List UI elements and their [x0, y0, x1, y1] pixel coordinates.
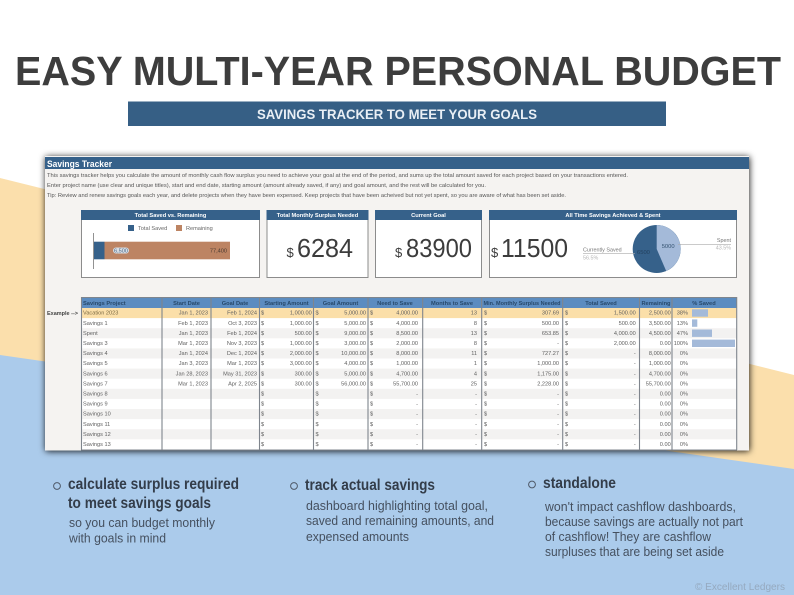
instructions text: Tip: Review and renew savings goals each year, and delete projects when they have been expensed. Keep projects that have been acheived but not yet spent, so you are aware of what has been set aside.	[47, 193, 566, 199]
savings projects table	[81, 297, 737, 450]
row: Savings 7: 25	[471, 381, 477, 387]
row: Savings 10	[83, 412, 688, 418]
row: Spent: 9,000.00	[344, 331, 366, 337]
row: Vacation 2023: 13	[471, 311, 477, 317]
row: Savings 5: $	[316, 361, 320, 367]
feature: standalone: won't impact cashflow dashboards,	[544, 500, 736, 514]
row: Savings 1: 3,500.00	[649, 321, 671, 327]
row: Vacation 2023: $	[565, 311, 569, 317]
feature: track actual savings: saved and remaining amounts, and	[306, 514, 494, 528]
row: Savings 6: 4	[474, 371, 477, 377]
row: Savings 6: 4,700.00	[396, 371, 418, 377]
row: Savings 13: $	[565, 442, 569, 448]
subtitle banner	[128, 102, 666, 126]
row: Vacation 2023: Jan 1, 2023	[179, 311, 208, 317]
row: Savings 1: $	[484, 321, 488, 327]
row: Savings 10: Savings 10	[83, 412, 111, 418]
row: Savings 5: 0%	[680, 361, 688, 367]
row: Savings 3: Nov 3, 2023	[227, 341, 257, 347]
row: Savings 11: -	[557, 422, 559, 428]
row: Savings 5: -	[634, 361, 636, 367]
subtitle banner: SAVINGS TRACKER TO MEET YOUR GOALS	[257, 106, 537, 122]
pie chart: 43.5%	[716, 246, 731, 252]
card: total saved vs remaining: Total Saved vs. Remaining	[135, 213, 207, 219]
row: Savings 13: -	[634, 442, 636, 448]
row: Savings 11: 0%	[680, 422, 688, 428]
row: Savings 10: $	[261, 412, 265, 418]
row: Savings 8	[83, 392, 688, 398]
table header row: Need to Save	[377, 301, 413, 307]
copyright: © Excellent Ledgers	[695, 581, 785, 593]
row: Savings 12: 0%	[680, 432, 688, 438]
row: Savings 5: $	[565, 361, 569, 367]
pie chart: 6500	[637, 250, 650, 256]
row: Savings 11: $	[261, 422, 265, 428]
row: Savings 3: $	[316, 341, 320, 347]
table header row: Months to Save	[431, 301, 473, 307]
row: Spent: $	[484, 331, 488, 337]
row: Vacation 2023: 38%	[677, 311, 688, 317]
row: Savings 4: 8,000.00	[649, 351, 671, 357]
column rules	[81, 297, 737, 450]
row: Vacation 2023: 1,500.00	[614, 311, 636, 317]
row: Savings 13: 0.00	[660, 442, 671, 448]
stacked bar chart	[94, 233, 230, 269]
example pointer label: Example -->	[47, 311, 79, 317]
stacked bar chart: 6,500	[114, 248, 128, 254]
table header row: Total Saved	[585, 301, 617, 307]
row: Savings 4: -	[634, 351, 636, 357]
row: Spent: Feb 1, 2024	[227, 331, 257, 337]
row: Savings 3	[83, 340, 735, 347]
card: all time savings achieved and spent: $	[491, 245, 499, 260]
row: Savings 9: 0.00	[660, 402, 671, 408]
row: Savings 6: Jan 28, 2023	[176, 371, 208, 377]
row: Savings 6: 300.00	[295, 371, 312, 377]
row: Spent: 13	[471, 331, 477, 337]
row: Savings 4: Dec 1, 2024	[227, 351, 257, 357]
row: Savings 7: Savings 7	[83, 381, 108, 387]
row: Savings 12: $	[316, 432, 320, 438]
row: Savings 5: $	[261, 361, 265, 367]
row: Savings 10: 0%	[680, 412, 688, 418]
row: Savings 13: $	[484, 442, 488, 448]
row: Savings 5: Jan 3, 2023	[179, 361, 208, 367]
row: Savings 7: $	[484, 381, 488, 387]
card: current goal: 83900	[406, 233, 472, 263]
row: Spent: 47%	[677, 331, 688, 337]
row: Savings 3: $	[261, 341, 265, 347]
table header row	[81, 297, 737, 308]
row: Savings 5: 1,000.00	[537, 361, 559, 367]
row: Savings 1: Oct 3, 2023	[228, 321, 257, 327]
card: total monthly surplus needed: 6284	[297, 233, 353, 263]
feature: track actual savings: dashboard highlighting total goal,	[306, 499, 488, 513]
row: Savings 5: $	[370, 361, 374, 367]
row: Savings 10: -	[557, 412, 559, 418]
row: Savings 11: Savings 11	[83, 422, 110, 428]
row: Savings 3: 3,000.00	[344, 341, 366, 347]
instructions text: Enter project name (use clear and unique titles), start and end date, starting amount (amount already saved, if any) and goal amount, and the rest will be calculated for you.	[47, 183, 486, 189]
row: Savings 4: $	[484, 351, 488, 357]
row: Savings 8: $	[484, 392, 488, 398]
row: Savings 6	[83, 371, 688, 377]
row: Savings 6: 4,700.00	[649, 371, 671, 377]
pie chart: 56.5%	[583, 256, 598, 262]
row: Savings 13	[83, 442, 688, 448]
row: Savings 6: $	[370, 371, 374, 377]
row: Savings 12: 0.00	[660, 432, 671, 438]
row: Savings 12: -	[416, 432, 418, 438]
row: Vacation 2023: 5,000.00	[344, 311, 366, 317]
card: current goal: $	[395, 245, 403, 260]
row: Savings 7: 300.00	[295, 381, 312, 387]
row: Savings 1: 500.00	[619, 321, 636, 327]
row: Savings 12: -	[557, 432, 559, 438]
row: Savings 12: $	[370, 432, 374, 438]
row: Savings 1: $	[565, 321, 569, 327]
row: Savings 7: -	[634, 381, 636, 387]
row: Savings 6: May 31, 2023	[223, 371, 257, 377]
row: Savings 6: $	[316, 371, 320, 377]
feature: calculate surplus	[54, 476, 239, 546]
card: current goal: Current Goal	[411, 213, 446, 219]
row: Savings 3: $	[484, 341, 488, 347]
row: Savings 9: 0%	[680, 402, 688, 408]
row: Savings 13: -	[475, 442, 477, 448]
row: Savings 1: 8	[474, 321, 477, 327]
row: Savings 5: 3,000.00	[290, 361, 312, 367]
row: Savings 6: $	[565, 371, 569, 377]
row: Spent: 4,500.00	[649, 331, 671, 337]
row: Savings 8: $	[261, 392, 265, 398]
row: Savings 3: 100%	[674, 341, 688, 347]
row: Savings 8: 0%	[680, 392, 688, 398]
card: total saved vs remaining	[81, 210, 260, 278]
row: Spent: 500.00	[295, 331, 312, 337]
feature: standalone	[529, 475, 744, 559]
row: Savings 6: $	[484, 371, 488, 377]
instructions text	[47, 173, 628, 199]
row: Savings 11: 0.00	[660, 422, 671, 428]
row: Savings 1: $	[261, 321, 265, 327]
feature: standalone: because savings are actually not part	[545, 515, 744, 529]
feature: calculate surplus: so you can budget monthly	[69, 516, 216, 530]
row: Savings 13: 0%	[680, 442, 688, 448]
row: Spent	[83, 330, 712, 337]
row: Savings 9: $	[370, 402, 374, 408]
row: Spent: Spent	[83, 331, 98, 337]
row: Savings 5: 1	[474, 361, 477, 367]
card: total monthly surplus needed: Total Monthly Surplus Needed	[277, 213, 359, 219]
row: Savings 1: Feb 1, 2023	[178, 321, 208, 327]
row: Savings 11: -	[634, 422, 636, 428]
row: Savings 4: $	[370, 351, 374, 357]
row: Savings 10: 0.00	[660, 412, 671, 418]
row: Savings 5: 1,000.00	[649, 361, 671, 367]
row: Savings 1	[83, 319, 697, 327]
row: Savings 1: Savings 1	[83, 321, 108, 327]
row: Savings 12: -	[634, 432, 636, 438]
row: Savings 9: -	[475, 402, 477, 408]
row: Savings 12: $	[565, 432, 569, 438]
row: Savings 1: 13%	[677, 321, 688, 327]
row: Savings 5: 4,000.00	[344, 361, 366, 367]
row: Savings 3: Savings 3	[83, 341, 108, 347]
row: Savings 4: 2,000.00	[290, 351, 312, 357]
row: Savings 3: $	[565, 341, 569, 347]
row: Spent: 653.85	[542, 331, 559, 337]
row: Savings 1: 5,000.00	[344, 321, 366, 327]
row: Savings 8: -	[557, 392, 559, 398]
row: Vacation 2023: 2,500.00	[649, 311, 671, 317]
row: Savings 10: $	[370, 412, 374, 418]
row: Savings 6: -	[634, 371, 636, 377]
card: total monthly surplus needed	[266, 210, 368, 278]
row: Savings 7: 55,700.00	[646, 381, 671, 387]
title: EASY MULTI-YEAR PERSONAL BUDGET	[15, 48, 781, 94]
row: Savings 7: 2,228.00	[537, 381, 559, 387]
instructions text: This savings tracker helps you calculate the amount of monthly cash flow surplus you need to achieve your goal at the end of the period, and sums up the total amount saved for each project based on your transactions entered.	[47, 173, 628, 179]
row: Savings 12	[83, 432, 688, 438]
row: Savings 12: Savings 12	[83, 432, 111, 438]
row: Savings 7: Mar 1, 2023	[178, 381, 208, 387]
row: Savings 6: $	[261, 371, 265, 377]
row: Savings 9: $	[565, 402, 569, 408]
pie chart: 5000	[662, 244, 675, 250]
table header row: Starting Amount	[264, 301, 309, 307]
row: Savings 7: $	[370, 381, 374, 387]
row: Savings 7	[83, 381, 688, 387]
row: Savings 3: $	[370, 341, 374, 347]
card: all time savings achieved and spent: All Time Savings Achieved & Spent	[565, 213, 661, 219]
feature: track actual savings: track actual savings	[305, 477, 435, 494]
row: Savings 7: $	[316, 381, 320, 387]
row: Savings 5: 1,000.00	[396, 361, 418, 367]
row: Savings 13: $	[316, 442, 320, 448]
row: Savings 3: Mar 1, 2023	[178, 341, 208, 347]
row: Savings 1: 4,000.00	[396, 321, 418, 327]
card: all time savings achieved and spent: 11500	[501, 233, 568, 263]
row: Savings 13: -	[416, 442, 418, 448]
card: total monthly surplus needed: $	[286, 245, 294, 260]
sheet header: Savings Tracker	[47, 159, 112, 169]
row: Savings 6: 0%	[680, 371, 688, 377]
sheet header	[45, 157, 749, 169]
row: Savings 1: $	[370, 321, 374, 327]
row: Savings 8: 0.00	[660, 392, 671, 398]
pie chart: Currently Saved	[583, 248, 622, 254]
table header row: Remaining	[641, 301, 671, 307]
row: Vacation 2023: 4,000.00	[396, 311, 418, 317]
row: Savings 13: $	[370, 442, 374, 448]
row: Savings 4: $	[316, 351, 320, 357]
row: Vacation 2023: $	[370, 311, 374, 317]
row: Savings 7: 55,700.00	[393, 381, 418, 387]
row: Savings 10: -	[634, 412, 636, 418]
row: Savings 11: $	[370, 422, 374, 428]
row: Savings 1: 1,000.00	[290, 321, 312, 327]
row: Savings 9: Savings 9	[83, 402, 108, 408]
row: Savings 5: Mar 1, 2023	[227, 361, 257, 367]
row: Savings 6: 1,175.00	[537, 371, 559, 377]
row: Vacation 2023: Vacation 2023	[83, 311, 118, 317]
row: Savings 1: $	[316, 321, 320, 327]
row: Savings 4: 727.27	[542, 351, 559, 357]
row: Vacation 2023: Feb 1, 2024	[227, 311, 257, 317]
feature: track actual savings	[291, 477, 494, 544]
feature: standalone: standalone	[543, 475, 616, 492]
row: Savings 8: -	[475, 392, 477, 398]
row: Savings 4	[83, 351, 688, 357]
row: Savings 7: 56,000.00	[341, 381, 366, 387]
row: Savings 4: 11	[471, 351, 477, 357]
row: Savings 12: $	[484, 432, 488, 438]
row: Savings 10: $	[484, 412, 488, 418]
row: Vacation 2023: 307.69	[542, 311, 559, 317]
row: Spent: $	[261, 331, 265, 337]
card: all time savings achieved and spent	[489, 210, 737, 278]
pie chart	[583, 225, 731, 273]
background: cream band	[0, 178, 794, 480]
feature: track actual savings: expensed amounts	[306, 530, 409, 544]
row: Savings 7: Apr 2, 2025	[228, 381, 257, 387]
feature: calculate surplus: with goals in mind	[68, 532, 166, 546]
row: Vacation 2023: $	[484, 311, 488, 317]
row: Savings 1: 500.00	[542, 321, 559, 327]
row: Savings 11	[83, 422, 688, 428]
row: Savings 3: 2,000.00	[614, 341, 636, 347]
row: Savings 13: -	[557, 442, 559, 448]
table header row: % Saved	[692, 301, 716, 307]
row: Savings 4: 10,000.00	[341, 351, 366, 357]
row: Savings 9: -	[416, 402, 418, 408]
row: Savings 4: 8,000.00	[396, 351, 418, 357]
background: blue band	[0, 355, 794, 595]
row: Savings 4: Jan 1, 2024	[179, 351, 208, 357]
row: Vacation 2023: $	[316, 311, 320, 317]
feature: calculate surplus: to meet savings goals	[68, 495, 211, 512]
row: Vacation 2023: 1,000.00	[290, 311, 312, 317]
legend	[128, 225, 213, 232]
row: Savings 8: $	[316, 392, 320, 398]
row: Savings 8: Savings 8	[83, 392, 108, 398]
row: Savings 9: -	[634, 402, 636, 408]
feature: standalone: of cashflow! They are cashflow	[545, 530, 712, 544]
row: Savings 3: -	[557, 341, 559, 347]
row: Savings 10: -	[475, 412, 477, 418]
stacked bar chart: 77,400	[210, 248, 227, 254]
row: Spent: $	[370, 331, 374, 337]
table header row: Savings Project	[83, 301, 126, 307]
feature: calculate surplus: calculate surplus required	[68, 476, 239, 493]
row: Savings 13: Savings 13	[83, 442, 111, 448]
row: Savings 9	[83, 402, 688, 408]
row: Savings 13: $	[261, 442, 265, 448]
table header row: Goal Date	[222, 301, 248, 307]
row: Savings 11: -	[475, 422, 477, 428]
row: Savings 9: $	[261, 402, 265, 408]
row: Vacation 2023: $	[261, 311, 265, 317]
row: Savings 10: -	[416, 412, 418, 418]
feature: standalone: surpluses that are being set aside	[545, 545, 724, 559]
row: Savings 9: -	[557, 402, 559, 408]
row: Savings 4: $	[261, 351, 265, 357]
row: Savings 5	[83, 361, 688, 367]
row: Savings 11: $	[484, 422, 488, 428]
row: Savings 7: $	[565, 381, 569, 387]
row: Savings 9: $	[484, 402, 488, 408]
row: Savings 11: $	[316, 422, 320, 428]
row: Savings 6: 5,000.00	[344, 371, 366, 377]
legend: Total Saved	[138, 226, 167, 232]
table header row: Min. Monthly Surplus Needed	[484, 301, 561, 307]
row: Savings 4: $	[565, 351, 569, 357]
panel: savings tracker sheet	[45, 156, 749, 450]
legend: Remaining	[186, 226, 213, 232]
row: Savings 5: Savings 5	[83, 361, 108, 367]
row: Savings 3: 1,000.00	[290, 341, 312, 347]
row: Savings 12: $	[261, 432, 265, 438]
row: Savings 12: -	[475, 432, 477, 438]
row: Savings 11: -	[416, 422, 418, 428]
row: Savings 7: $	[261, 381, 265, 387]
row: Savings 8: -	[416, 392, 418, 398]
row: Savings 8: $	[565, 392, 569, 398]
row: Savings 9: $	[316, 402, 320, 408]
row: Savings 4: 0%	[680, 351, 688, 357]
row: Savings 7: 0%	[680, 381, 688, 387]
row: Spent: $	[316, 331, 320, 337]
row: Savings 4: Savings 4	[83, 351, 108, 357]
table header row: Goal Amount	[323, 301, 358, 307]
row: Spent: $	[565, 331, 569, 337]
row: Savings 3: 8	[474, 341, 477, 347]
row: Savings 10: $	[316, 412, 320, 418]
row: Spent: 8,500.00	[396, 331, 418, 337]
row: Vacation 2023	[83, 309, 708, 317]
row: Savings 6: Savings 6	[83, 371, 108, 377]
row: Savings 3: 0.00	[660, 341, 671, 347]
row: Savings 5: $	[484, 361, 488, 367]
row: Savings 10: $	[565, 412, 569, 418]
row: Savings 3: 2,000.00	[396, 341, 418, 347]
card: current goal	[375, 210, 482, 278]
row: Spent: 4,000.00	[614, 331, 636, 337]
row: Spent: Jan 1, 2023	[179, 331, 208, 337]
row: Savings 8: $	[370, 392, 374, 398]
row: Savings 8: -	[634, 392, 636, 398]
table header row: Start Date	[173, 301, 200, 307]
pie chart: Spent	[717, 238, 731, 244]
row: Savings 11: $	[565, 422, 569, 428]
